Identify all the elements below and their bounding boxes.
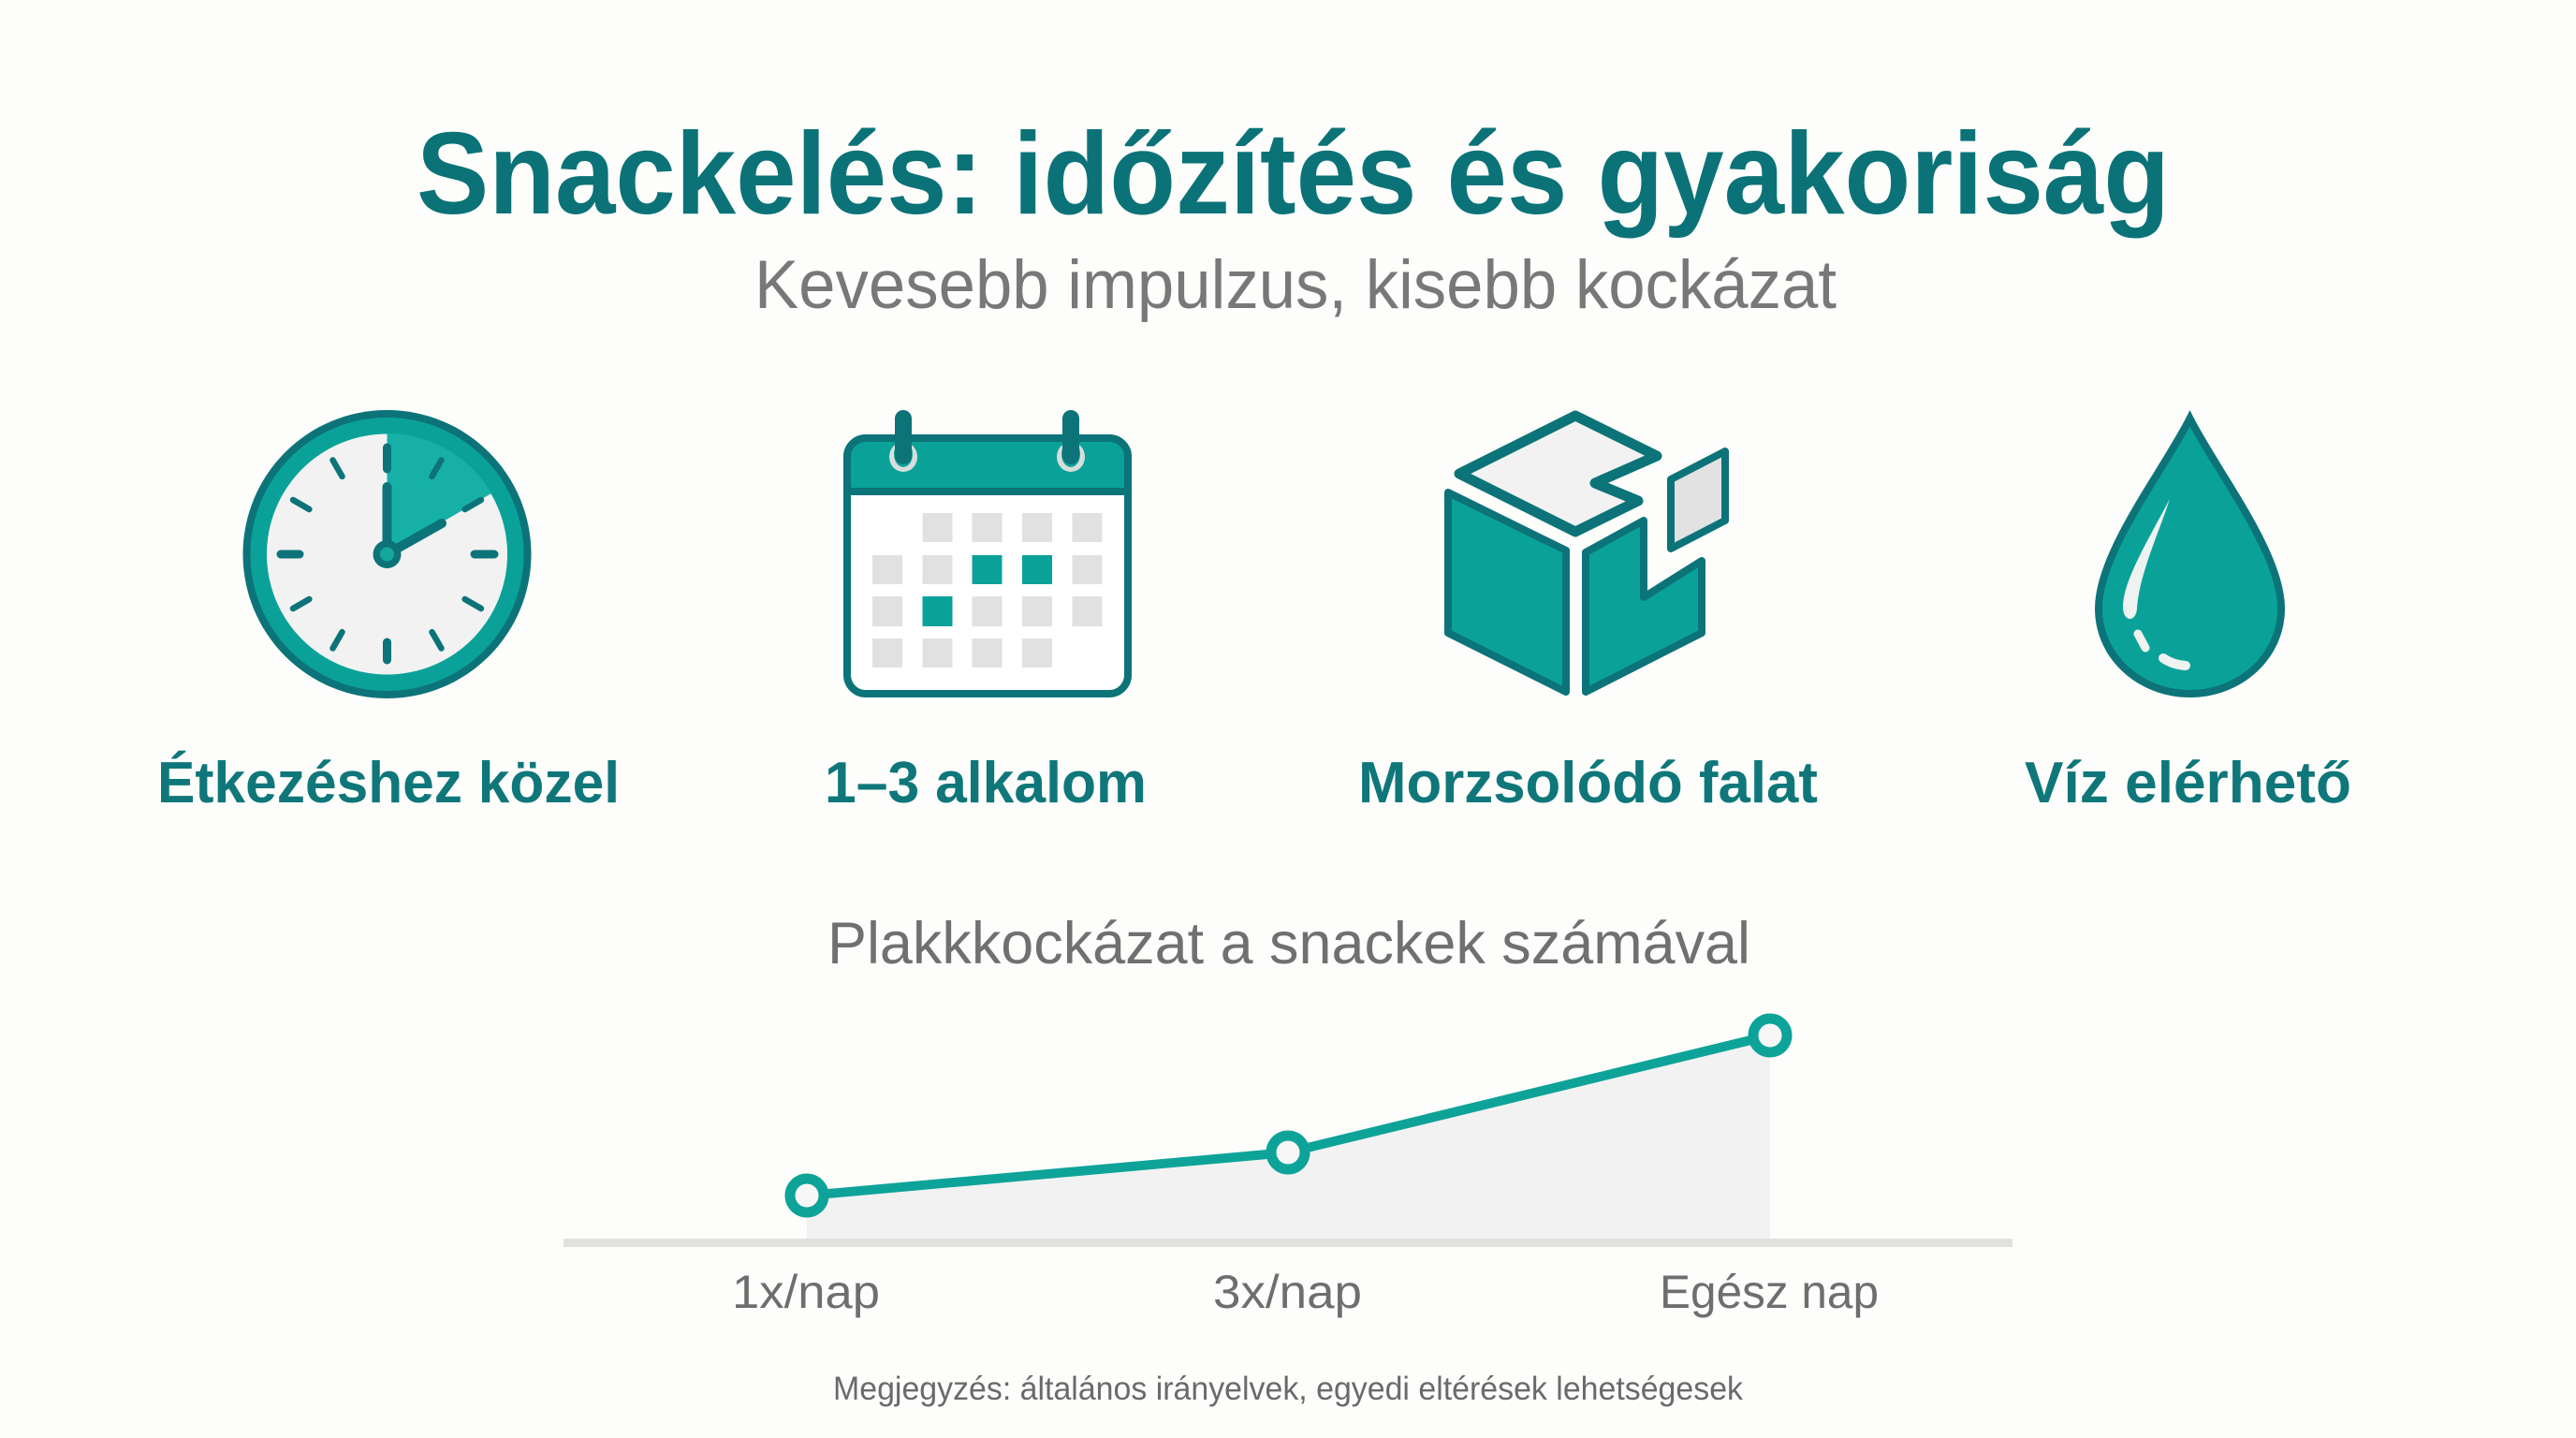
label: 1–3 alkalom: 1–3 alkalom	[825, 751, 1147, 815]
line chart	[564, 1019, 2012, 1318]
footnote: Megjegyzés: általános irányelvek, egyedi eltérések lehetségesek	[833, 1371, 1743, 1407]
panel: one to three times	[825, 418, 1147, 815]
point: 3x/nap	[1271, 1136, 1305, 1169]
panel: eating close to meals	[157, 410, 620, 815]
label: Morzsolódó falat: Morzsolódó falat	[1358, 751, 1818, 815]
axis label: 1x/nap: 1x/nap	[732, 1266, 880, 1318]
area under line	[807, 1035, 1770, 1239]
point: Egész nap	[1753, 1019, 1787, 1052]
panel: crumbly bite	[1358, 416, 1818, 815]
axis label: Egész nap: Egész nap	[1660, 1266, 1879, 1318]
data line	[807, 1035, 1770, 1196]
label: Víz elérhető: Víz elérhető	[2025, 751, 2351, 815]
axis label: 3x/nap: 3x/nap	[1213, 1266, 1362, 1318]
icon: crumbling box	[1448, 416, 1725, 692]
title: Snackelés: időzítés és gyakoriság	[417, 110, 2170, 239]
icon: water drop	[2099, 418, 2281, 694]
icon: calendar	[847, 418, 1128, 694]
label: Étkezéshez közel: Étkezéshez közel	[157, 751, 620, 815]
subtitle: Kevesebb impulzus, kisebb kockázat	[754, 247, 1837, 323]
icon: clock	[243, 410, 532, 698]
panel: water available	[2025, 418, 2351, 815]
chart heading: Plakkkockázat a snackek számával	[827, 911, 1750, 976]
point: 1x/nap	[790, 1179, 824, 1212]
axis baseline	[564, 1239, 2012, 1247]
